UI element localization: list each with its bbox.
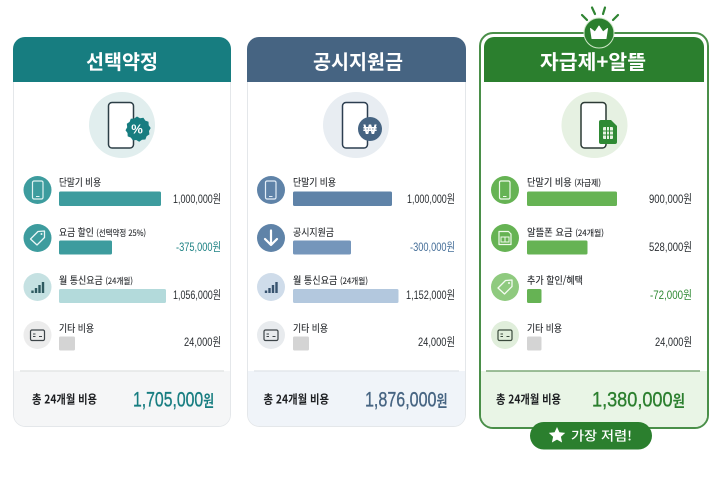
total: 공시지원금 — [248, 371, 465, 426]
row: 월 통신요금: 월 통신요금 (24개월) — [293, 272, 368, 287]
row: 월 통신요금: 1,152,000원 — [406, 288, 455, 302]
badge: 가장 저렴!: 가장 저렴! — [571, 426, 632, 444]
row: 단말기 비용 (자급제): 900,000원 — [649, 192, 692, 206]
header: 선택약정 — [13, 37, 231, 82]
header: 공시지원금: 공시지원금 — [313, 46, 403, 75]
row: 공시지원금: 공시지원금 — [293, 224, 334, 239]
icon: card — [24, 321, 52, 349]
icon: card — [257, 321, 285, 349]
row: 단말기 비용 — [24, 174, 221, 206]
row: 공시지원금 — [257, 224, 455, 254]
row: 추가 할인/혜택: 추가 할인/혜택 — [527, 272, 583, 287]
row: 알뜰폰 요금: 알뜰폰 요금 (24개월) — [527, 224, 604, 239]
row: 기타 비용: 기타 비용 — [293, 320, 328, 335]
row: 요금 할인 — [24, 224, 221, 254]
icon: phone with percent badge — [89, 92, 155, 158]
row: 추가 할인/혜택 — [491, 272, 692, 303]
row: 요금 할인: 요금 할인 (선택약정 25%) — [59, 224, 146, 239]
icon: phone with percent badge: % — [131, 122, 143, 136]
row: 공시지원금: -300,000원 — [410, 240, 455, 254]
row: 기타 비용: 24,000원 — [655, 335, 692, 349]
icon: crown badge — [582, 8, 618, 48]
icon: handset — [24, 176, 52, 204]
row: 단말기 비용: 단말기 비용 — [59, 174, 101, 189]
icon: handset — [491, 176, 519, 204]
row: 기타 비용: 기타 비용 — [527, 320, 562, 335]
icon: card — [491, 321, 519, 349]
row: 단말기 비용 (자급제): 단말기 비용 (자급제) — [527, 174, 601, 189]
icon: phone with won badge: ₩ — [363, 121, 377, 137]
icon: price tag — [24, 224, 52, 252]
panel: 공시지원금 — [247, 37, 466, 426]
total: 선택약정 — [14, 371, 230, 426]
row: 기타 비용: 기타 비용 — [59, 320, 94, 335]
icon: signal bars — [257, 273, 285, 301]
row: 단말기 비용: 1,000,000원 — [173, 192, 221, 206]
header: 자급제+알뜰: 자급제+알뜰 — [540, 46, 646, 75]
row: 기타 비용 — [257, 320, 455, 350]
row: 기타 비용: 24,000원 — [184, 335, 221, 349]
icon: down arrow — [257, 224, 285, 252]
row: 기타 비용: 24,000원 — [418, 335, 455, 349]
total: 자급제+알뜰 — [481, 371, 707, 427]
header: 자급제+알뜰 — [484, 37, 704, 82]
row: 기타 비용 — [24, 320, 221, 350]
total: 자급제+알뜰: 총 24개월 비용 — [496, 390, 561, 408]
header: 공시지원금 — [247, 37, 466, 82]
total: 선택약정: 1,705,000원 — [133, 388, 214, 412]
panel: 선택약정 — [13, 37, 231, 426]
row: 월 통신요금: 1,056,000원 — [173, 288, 221, 302]
total: 공시지원금: 총 24개월 비용 — [264, 390, 329, 408]
row: 추가 할인/혜택: -72,000원 — [650, 288, 692, 302]
icon: SIM — [491, 224, 519, 252]
row: 월 통신요금 — [24, 272, 221, 303]
icon: phone with SIM card — [562, 92, 628, 158]
total: 공시지원금: 1,876,000원 — [365, 388, 448, 412]
row: 월 통신요금 — [257, 272, 455, 303]
header: 선택약정: 선택약정 — [86, 46, 158, 75]
row: 단말기 비용 (자급제) — [491, 174, 692, 206]
icon: phone with won badge — [323, 92, 389, 158]
row: 알뜰폰 요금: 528,000원 — [649, 240, 692, 254]
row: 단말기 비용: 단말기 비용 — [293, 174, 336, 189]
row: 기타 비용 — [491, 320, 692, 350]
row: 단말기 비용 — [257, 174, 455, 206]
total: 선택약정: 총 24개월 비용 — [32, 390, 97, 408]
row: 요금 할인: -375,000원 — [176, 240, 221, 254]
icon: price tag — [491, 273, 519, 301]
panel: 자급제+알뜰 — [480, 8, 708, 450]
row: 단말기 비용: 1,000,000원 — [407, 192, 455, 206]
total: 자급제+알뜰: 1,380,000원 — [592, 388, 685, 412]
row: 알뜰폰 요금 — [491, 224, 692, 254]
badge: 가장 저렴! — [530, 422, 652, 450]
icon: signal bars — [24, 273, 52, 301]
row: 월 통신요금: 월 통신요금 (24개월) — [59, 272, 133, 287]
icon: handset — [257, 176, 285, 204]
